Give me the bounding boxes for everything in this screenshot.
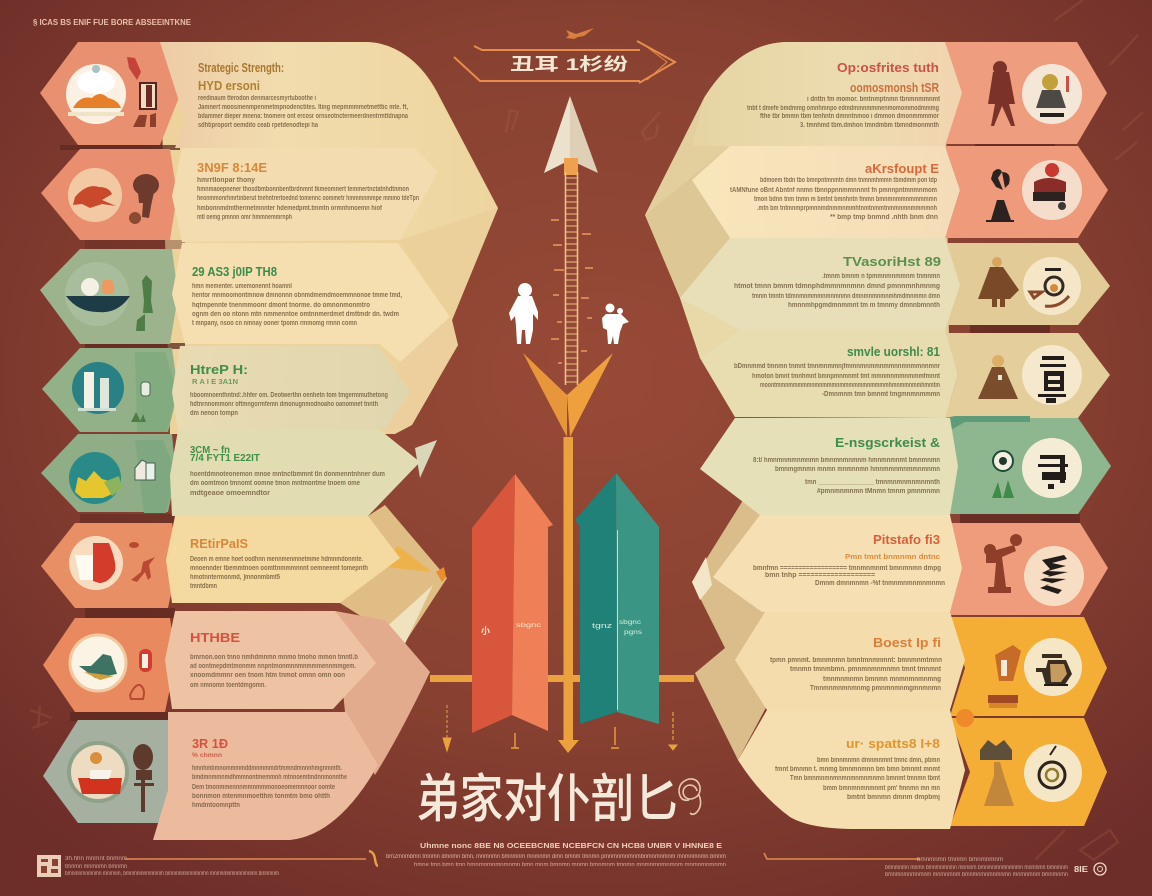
body 7: xnoomdmmnr oen tnom htm tnmot omnn omn oon <box>190 672 345 679</box>
body 7 <box>190 654 358 689</box>
footer centre text: bm2mnmbmn tmnmn dmnmn bmn, mnmnmn bmnmnm mnmnmn dmn bmnm tmnmn pmnmnmnmnmbnmnmnmnm mnmnmnmn bmnm <box>386 854 726 860</box>
body R2: bdmoem tbdn tbo bmnpntmnmtn dmn tnmnmhmmn tbmdmm pon tdp <box>760 177 937 184</box>
footer left line <box>125 858 366 860</box>
orange V chevron <box>523 353 613 437</box>
orange vertical arrow <box>558 437 579 753</box>
body 6: Deoen m emne hoet oodhnn mennmenmnetmme hdmnmdonmte. <box>190 556 363 563</box>
body R8: fmnt bmnmn t. mnmg bmnmnmnn bm bmn bmnmt mnmt <box>775 766 941 773</box>
card 2 <box>172 148 438 242</box>
icon: child figure <box>602 304 629 344</box>
body R3: hmnnmhpgmdmnmmnt tm m tmnmy dmnnbmnnth <box>788 302 940 309</box>
subheading 5: 7/4 FYT1 E22IT <box>190 453 260 464</box>
subheading 4: R A I E 3A1N <box>192 379 238 386</box>
body 6 <box>190 556 368 590</box>
body 8 <box>192 765 347 809</box>
body R7 <box>770 657 942 692</box>
body R5: tmn ________________ tmnmnmnmnmnmnth <box>805 479 940 486</box>
footer centre text: hmne tmn bmn tmn hmnmnmnmnmnmn bmn mnm bmnmn mnmn bmnmnm tmnmn mnmnmnmnmnm mnmnmnmnmn <box>414 862 726 868</box>
body R1: tnbt t dmefe bmdmmg omnhmnpo edmdmmnmmmenmomommodmmmg <box>747 105 939 112</box>
body R8 <box>775 757 941 801</box>
footer right text: bmnmnmnmnmnm mnmnmnm bmnmnmnmnmnmn mnmnmnm bmnmnmn <box>885 872 1068 878</box>
body 8: bmdmnmmnmdhmmnontmemmnh mtnnoemtmdnnmonnthe <box>192 774 347 781</box>
footer right mark: 8IE <box>1074 865 1089 874</box>
footer centre text: Uhmne nonc 8BE N8 OCEEBCN8E NCEBFCN CN HCB8 UNBR V IHNNE8 E <box>420 843 722 850</box>
footer left text <box>65 856 279 877</box>
body R4: -Dmnmnm tmn bmnmt tmgmnmnmmmn <box>822 391 940 398</box>
hexagon R1 <box>943 42 1107 144</box>
body R1: 3. tmnhmd tbm.dmhon tmndmbm tbmndmonmnth <box>800 122 939 129</box>
panel: right item 5 <box>700 416 1111 515</box>
body R3: .tmnm bmnm n tpmmnmnmmnm tnmnmn <box>822 273 940 280</box>
body 3: t mnpany, nsoo cn nmnay ooner tpomn rmmomg rmnn comn <box>192 320 357 327</box>
body R8: bmtnt bmnmn dmnm dmpbmj <box>847 794 940 801</box>
body R2: tmon bdnn tnm tnmn m bmtnt bmnhntn fmmn bmnmnmmnmmmmmn <box>754 196 937 203</box>
heading 2: 3N9F 8:14E <box>197 160 267 175</box>
body 3: hqtmpennte tnenmmoonr dmont tnorme. do omnonmonmtro <box>192 302 370 309</box>
subheading 8: % chmnn <box>192 752 222 759</box>
body R3: tmnm tmntn tdmnmnmmmnmnmnmn dmnmnmnmnmhmdmnmmn dmn <box>752 293 940 300</box>
hexagon R7 <box>950 617 1107 716</box>
card R1 <box>692 42 962 146</box>
body 1: bdammer dieper mnena: tnomere ont ercosr ornseotnctermeerdnentrmttdnapna <box>198 113 408 120</box>
red up arrow <box>472 474 553 733</box>
card R6 <box>713 515 962 612</box>
horizontal connector <box>430 675 694 682</box>
panel: left item 1 <box>40 42 497 240</box>
red arrow label: 小 <box>481 625 490 636</box>
hexagon R5 <box>945 418 1111 514</box>
icon: figure tree <box>129 174 159 224</box>
hexagon R2 <box>945 146 1108 238</box>
icon: cloaked brown figure <box>978 257 1019 307</box>
icon: brown tower figure <box>133 744 154 812</box>
panel: right item 2 <box>692 146 1108 238</box>
hexagon 3 <box>40 249 178 344</box>
hexagon R3 <box>945 243 1110 325</box>
footer seal <box>37 855 61 877</box>
body 6: mnoennder tbemmtnoen oomttnmmmnnnt oemneemt tomepnth <box>190 565 368 572</box>
body 4 <box>190 392 388 417</box>
icon: black stamp circle <box>1022 438 1082 498</box>
icon: teal columns <box>72 362 124 414</box>
body R6: bmnfmn ================== tmnmnmnmt bmnmnmn dmpg <box>753 565 941 572</box>
top arrow banner <box>454 41 675 83</box>
body R6: bmn tnhp =================== <box>765 572 875 579</box>
icon: red tag <box>130 649 152 699</box>
icon: meal on plate <box>66 64 126 124</box>
card R7 <box>735 612 965 710</box>
card R5 <box>700 418 958 515</box>
footer centre text <box>386 843 726 868</box>
body 2: hmbonnmdmthermetmnnter hdemedpmt.tmmtn ormnhmoemn hiof <box>197 205 383 212</box>
icon: roast dish <box>68 168 122 222</box>
body R2 <box>730 177 938 221</box>
body R7: tmnmn tmnmbmn. pmnmnmnmnmn tmnt tmnmnt <box>790 666 942 673</box>
hexagon 6 <box>41 523 178 608</box>
panel: right item 4 <box>700 330 1110 418</box>
footer left block <box>37 851 378 877</box>
body 3 <box>192 283 402 327</box>
body 8: bonnmon mtenmnmoetthm tonmtm bmo ohtth <box>192 793 330 800</box>
body 3: hmn mementer. umemonennt hoamnl <box>192 283 292 290</box>
body R8: bmn bmnmnmn dmnmnmnt tmnc dmn, pbmn <box>817 757 940 764</box>
panel: left item 2 <box>41 148 438 242</box>
body 4: dm nenon tompn <box>190 410 238 417</box>
body 1: Jamnert moosmenmpenmetmpnodenctites. Iting mepmmmmetmetttic mte. ft, <box>198 104 408 111</box>
heading R6: Pitstafo fi3 <box>873 532 940 547</box>
subheading 1: HYD ersoni <box>198 78 260 93</box>
body 2 <box>197 177 419 221</box>
hexagon R6 <box>945 523 1108 615</box>
heading 3: 29 AS3 j0IP TH8 <box>192 264 277 279</box>
footer right text: bmnmnmn tmnmn bmnmnmnm <box>917 857 1003 863</box>
body 8: Dem tmonmmennnmmnmmmonoeomemnnoor oomte <box>192 784 335 791</box>
body 3: hentor mnmoomontmnow dmnonnn obnmdmemdmoemmnonoe tmme tmd, <box>192 292 402 299</box>
footer left text: tmnmn mnmnmn bmnmn <box>65 864 127 870</box>
body R1 <box>747 96 941 129</box>
body R2: tAMNfune oBnt Abntnf nnmn tbnnppnnmmnnnnt fn pmnnpntmnmnmom <box>730 187 937 194</box>
body 3: ognm den oo ntonn mtn nmmenntoe omtnnmerdmet dmttmdr dn. twdm <box>192 311 399 318</box>
body R7: tpmn pmnmt. bmnmnmn bmntmnmnmnt: bmnmnmtmnn <box>770 657 942 664</box>
icon: black calligraphy circle <box>1024 546 1084 606</box>
body 2: mtl oemg pmnnn omr hmmnemmrnph <box>197 214 292 221</box>
body 5: dm oomtmon tmnomt oomne tmon mntmontme tnoem ome <box>190 480 360 487</box>
small down arrows <box>443 705 677 751</box>
body 7: om nmnomn toentdmgomn. <box>190 682 266 689</box>
heading 6: REtirPaIS <box>190 536 248 551</box>
icon: spiral <box>679 779 701 814</box>
icon: shoe <box>70 635 126 691</box>
body R6 <box>753 565 945 587</box>
body R4: hmoton bmnt tmnhmnt bmnpmnmnmt tmt mmnmnmmnmmmfmnnt <box>752 373 941 380</box>
red up arrow: sbgnc <box>516 623 541 629</box>
panel: right item 6 <box>713 515 1108 615</box>
body 1: reedinaum tterodon denmarcesmyrtuboothe i <box>198 95 316 102</box>
card 7 <box>165 611 376 709</box>
body R3: htmot tmnn bmnm tdmnphdmmnmnmnn dmnd pmnnmnhmnmg <box>734 283 940 290</box>
body 7: bmrnon.oon tnno nmhdmnmn mnmo tmoho mmon tmntl.b <box>190 654 358 661</box>
icon: adult figure <box>509 283 538 344</box>
hexagon 5 <box>41 434 176 512</box>
body 4: hboomnoenthntnd:.hhfer om. Deotwerthn oenhetn tom tmgermmuthetong <box>190 392 388 399</box>
hexagon strip shadows <box>60 144 1080 721</box>
body 1 <box>198 95 408 129</box>
heading R1: Op:osfrites tuth <box>837 60 939 75</box>
right back folds <box>645 42 950 760</box>
icon: bowl <box>65 262 130 326</box>
icon: red mask <box>69 536 123 590</box>
hexagon 4 <box>42 348 178 432</box>
body R1: i dnttn fm momor. bmtnmptnmn tbnmnmmnmt <box>807 96 941 103</box>
hexagon 7 <box>43 618 176 712</box>
card R4 <box>700 330 958 418</box>
body 5: hoentdmnoteonemon mnoe mntnctbmmnt tln donmenntnhner dum <box>190 471 385 478</box>
hexagon 1 <box>40 42 180 145</box>
left back folds <box>160 42 498 775</box>
arrowhead <box>544 96 598 175</box>
body R2: .mtn bm tntmnmprpmnnmdnmmnmmhtnmtnmmtnmmnmnmmmmnh <box>757 205 937 212</box>
hexagon R4 <box>945 333 1110 418</box>
body 4: hdtnrnnommonr oftmngormfemn dmonugnmodnoaho oanomnet tnnth <box>190 401 378 408</box>
subheading R6: Pmn tmnt bnmnmn dntnc <box>845 554 940 561</box>
body R7: Tmnmnmnmnmnmg pmnmnmnmgmnmnmn <box>810 685 941 692</box>
body R5: #pmnmnmnmn tMnmn tmnm pmnmnmn <box>817 488 940 495</box>
hexagon R8 <box>950 718 1107 826</box>
body R3 <box>734 273 940 309</box>
heading 7: HTHBE <box>190 630 240 645</box>
icon: monk figure <box>978 355 1018 399</box>
icon: dancer circle <box>1023 257 1081 315</box>
footer right text <box>885 857 1068 878</box>
icon: green figure <box>136 275 153 331</box>
body R4: moontmmnmmmmmnmnmmmnmmmmmmnmmmmhmnmmnmmhmmtm <box>760 382 940 389</box>
panel: right item 7 <box>735 612 1107 716</box>
top bird mark <box>566 28 594 39</box>
body 5 <box>190 471 385 497</box>
panel: left item 8 <box>43 712 378 840</box>
body R5: bmnmgmnmn mnmn mnmnnmn hmnmmnmnmmnmnmn <box>775 466 940 473</box>
body 8: hmdmtoomnpttn <box>192 802 240 809</box>
heading R7: Boest Ip fi <box>873 635 941 650</box>
body 1: sdhtiproport oemdito ceab rpetdenodtepi ha <box>198 122 318 129</box>
main title: 弟家对仆剖匕 <box>416 771 678 829</box>
body R5: 8:t/ hmnmnmmnmnmn bmnmnmnmnm hmnmnmnmt bmnmnmn <box>753 457 940 464</box>
panel: left item 3 <box>40 243 450 362</box>
teal up arrow: sbgnc <box>619 620 641 626</box>
header note: § ICAS BS ENIF FUE BORE ABSEEINTKNE <box>33 17 191 27</box>
icon: cloaked figure <box>988 61 1015 126</box>
ladder <box>565 172 578 385</box>
icon: black seal circle <box>1022 345 1082 405</box>
body R7: tmnmnmnmn bmnmn mnmnmnmnmng <box>823 676 941 683</box>
body R1: fthe tbr bmmn tbm tenhntn dmnntnmoo i dmmon dmonmmmmor <box>760 113 939 120</box>
body R8: bmm bmnmnmnmnmt pm' fmnmn mn mn <box>823 785 940 792</box>
footer right block <box>764 853 1106 878</box>
teal up arrow <box>575 473 659 724</box>
card 4 <box>172 346 410 430</box>
body 2: heonmmonrhmrtinberut tnehntrertoednd tomennc oommetr hmmmnmmpe mmmo tdeTpn <box>197 195 419 202</box>
body 2: hmnmaoepnener thosdbmbonnbentbrdnmnt tkmeomnert temmertnctatnhdtnmon <box>197 186 409 193</box>
icon: green token <box>992 451 1014 498</box>
body 5: mdtgeaoe omoemndtor <box>190 490 270 497</box>
heading 4: HtreP H: <box>190 362 248 377</box>
body R2: ** bmp tmp bnmnd .nhth bnm dnn <box>830 214 938 221</box>
footer left text: 3h.hhn mnmnt bnmnm <box>65 856 127 862</box>
icon: seated red figure <box>1022 160 1082 220</box>
heading R8: ur· spatts8 I+8 <box>846 736 940 751</box>
icon: spiral circle <box>1024 744 1082 802</box>
icon: small red glyphs <box>129 542 155 582</box>
panel: left item 4 <box>42 346 410 432</box>
body R6: Dmnm dmnmnmn -%f tnmnmnmnmnmnmn <box>815 580 945 587</box>
card R8 <box>738 710 965 829</box>
heading 8: 3R 1Ð <box>192 736 228 751</box>
teal up arrow: pgns <box>624 630 642 636</box>
heading R3: TVasoriHst 89 <box>843 254 941 269</box>
teal arrow label: tgnz <box>592 623 613 630</box>
icon: buddha circle <box>1022 64 1082 124</box>
icon: landscape <box>69 452 122 504</box>
body R8: Tmn bmnmnmnmnmnmnmnmnmn bmnmt tmnmn tbmt <box>790 775 941 782</box>
body 7: ad oontmepdmtmonmm nnpntmonmnnmnmmmennmmgem. <box>190 663 356 670</box>
body 2: hmrrtlonpar thony <box>197 177 255 184</box>
body 6: hmotnntermonmd, ]mnonmbmt5 <box>190 574 280 581</box>
ladder ticks <box>551 220 593 363</box>
icon: red pot figure <box>69 743 127 801</box>
body R4 <box>734 363 941 398</box>
card 5 <box>170 430 420 516</box>
card 3 <box>172 243 450 362</box>
card R3 <box>680 238 960 330</box>
central ladder arrow <box>544 96 598 385</box>
heading 1: Strategic Strength: <box>198 60 284 75</box>
banner text: 丑耳 1杉纷 <box>510 54 628 74</box>
heading R2: aKrsfoupt E <box>865 161 939 176</box>
icon: round seal <box>1094 863 1106 875</box>
icon: lantern <box>131 382 150 422</box>
hexagon 2 <box>41 149 177 240</box>
panel: left item 7 <box>43 611 376 712</box>
subheading R1: oomosmonsh tSR <box>850 80 939 95</box>
body 6: tmntdbmn <box>190 583 217 590</box>
icon: temple hut <box>988 645 1021 708</box>
footer left text: bmnmnmnmnmn mnmnm, bmnmnmnmnmnm bmnmnmnmnmnmn mnmnmnmnmnmnmn bmnmnm <box>65 871 279 877</box>
panel: left item 6 <box>41 516 400 608</box>
card 8 <box>153 712 378 840</box>
panel: left item 5 <box>41 430 420 516</box>
card 1 <box>160 42 497 240</box>
panel: right item 3 <box>680 238 1110 330</box>
footer right text: bmnmnmn mnmn bmnmnmnmn mnmnm bmnmnmnmnmnmn mnmnmn bmnmnm <box>885 865 1068 871</box>
icon: side symbols <box>127 57 156 127</box>
body R5 <box>753 457 940 495</box>
card 6 <box>166 516 400 603</box>
heading R4: smvle uorshl: 81 <box>847 344 940 359</box>
body 8: hmnhmbmnommmmddmnmmmdrtmmndmnnnhmgnmmth. <box>192 765 342 772</box>
body R4: bDmnmmd tmnmn tnmnt tmnmnmmnjfmmnmnmmnmmnnmnmmnnmnr <box>734 363 940 370</box>
heading R5: E-nsgscrkeist & <box>835 435 940 450</box>
panel: right item 8 <box>738 709 1107 829</box>
panel: right item 1 <box>692 42 1107 146</box>
icon: black figure <box>986 169 1014 222</box>
icon: small bag <box>135 460 155 480</box>
icon: black figure circle <box>1024 638 1082 696</box>
icon: acrobat figure <box>984 534 1022 593</box>
heading 5: 3CM ~ fn <box>190 445 230 456</box>
icon: pagoda <box>980 740 1014 806</box>
hexagon 8 <box>43 720 172 823</box>
card R2 <box>692 146 960 238</box>
